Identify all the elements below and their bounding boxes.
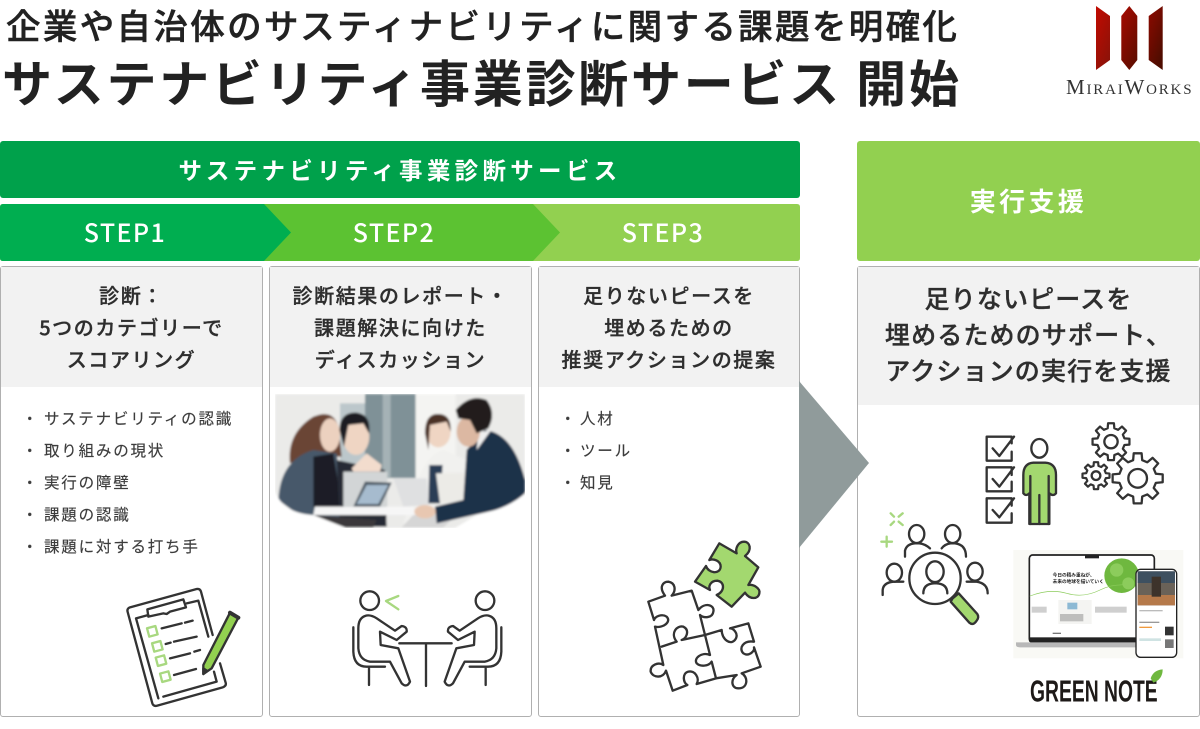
action list: ツール bbox=[580, 439, 632, 461]
panel heading: 課題解決に向けた bbox=[314, 312, 487, 341]
icon: checklist and person bbox=[987, 437, 1056, 524]
category list: 実行の障壁 bbox=[44, 471, 131, 493]
panel heading: スコアリング bbox=[67, 344, 196, 373]
step 3 label: STEP3 bbox=[622, 214, 704, 250]
panel heading: アクションの実行を支援 bbox=[885, 352, 1172, 388]
panel heading: 埋めるためのサポート、 bbox=[885, 316, 1172, 352]
icon: two people in discussion bbox=[352, 590, 502, 688]
panel heading: 診断結果のレポート・ bbox=[292, 280, 508, 309]
logo: MiraiWorks bbox=[1066, 6, 1193, 99]
category list: ・ bbox=[22, 535, 38, 557]
banner: implementation support: 実行支援 bbox=[970, 182, 1087, 219]
panel heading bbox=[1, 267, 262, 387]
panel: step 3 proposal bbox=[538, 266, 800, 717]
action list: 知見 bbox=[580, 471, 615, 493]
action list: ・ bbox=[560, 407, 576, 429]
photo: business meeting bbox=[275, 394, 525, 528]
banner: service name bbox=[0, 141, 800, 198]
icon: gears bbox=[1082, 423, 1163, 503]
panel: implementation support bbox=[857, 266, 1200, 717]
title: main heading: サステナビリティ事業診断サービス 開始 bbox=[2, 45, 962, 117]
step 1 label: STEP1 bbox=[84, 214, 166, 250]
logo: MiraiWorks: MiraiWorks bbox=[1066, 75, 1193, 99]
panel heading bbox=[270, 267, 531, 387]
category list: 取り組みの現状 bbox=[44, 439, 165, 461]
banner: implementation support bbox=[857, 141, 1200, 261]
step 2 label: STEP2 bbox=[353, 214, 435, 250]
logo: GREEN NOTE bbox=[1030, 669, 1163, 709]
banner: service name: サステナビリティ事業診断サービス bbox=[179, 152, 621, 186]
action list bbox=[560, 407, 632, 493]
panel: step 2 report bbox=[269, 266, 532, 717]
category list: サステナビリティの認識 bbox=[44, 407, 233, 429]
panel heading bbox=[858, 267, 1199, 405]
panel heading: 推奨アクションの提案 bbox=[562, 344, 776, 373]
image: website on laptop and phone: 未来の地球を描いていく bbox=[1053, 578, 1104, 585]
panel heading: ディスカッション bbox=[315, 344, 486, 373]
category list bbox=[22, 407, 233, 557]
panel heading bbox=[539, 267, 799, 387]
category list: ・ bbox=[22, 439, 38, 461]
action list: 人材 bbox=[580, 407, 615, 429]
action list: ・ bbox=[560, 439, 576, 461]
panel: step 1 diagnosis bbox=[0, 266, 263, 717]
step bar bbox=[0, 204, 800, 261]
arrow: to implementation support bbox=[799, 381, 869, 548]
panel heading: 足りないピースを bbox=[583, 280, 755, 309]
image: website on laptop and phone: 今日の積み重ねが、 bbox=[1053, 572, 1094, 579]
category list: ・ bbox=[22, 471, 38, 493]
panel heading: 診断： bbox=[99, 280, 164, 309]
category list: 課題の認識 bbox=[44, 503, 131, 525]
icon: puzzle pieces bbox=[647, 540, 762, 692]
category list: 課題に対する打ち手 bbox=[44, 535, 200, 557]
image: website on laptop and phone bbox=[1013, 550, 1183, 658]
icons and product image bbox=[880, 422, 1183, 709]
panel heading: 5つのカテゴリーで bbox=[39, 312, 224, 341]
panel heading: 埋めるための bbox=[604, 312, 734, 341]
title: subtitle line: 企業や自治体のサスティナビリティに関する課題を明確化 bbox=[6, 0, 959, 49]
panel heading: 足りないピースを bbox=[925, 280, 1132, 316]
category list: ・ bbox=[22, 503, 38, 525]
icon: people under magnifier bbox=[881, 513, 988, 624]
icon: clipboard and pencil bbox=[126, 588, 240, 708]
action list: ・ bbox=[560, 471, 576, 493]
category list: ・ bbox=[22, 407, 38, 429]
